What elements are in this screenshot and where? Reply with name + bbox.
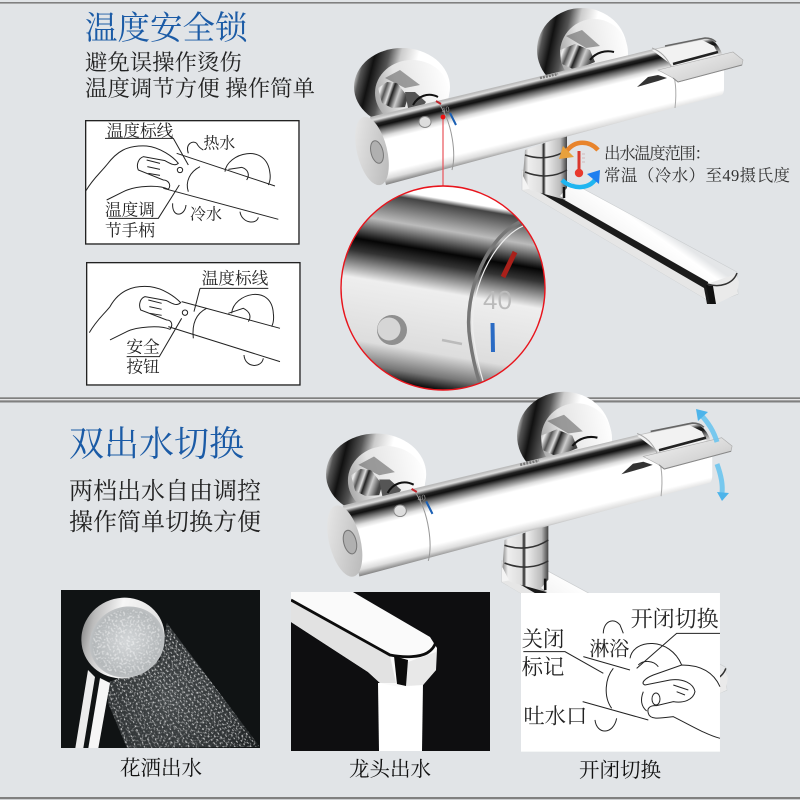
text block: dual outlet description: 两档出水自由调控 (69, 478, 261, 505)
text block: water temperature range (604, 144, 790, 185)
diagram: open and close switching: 淋浴 (589, 638, 629, 661)
magnifier: temperature dial close-up (341, 186, 545, 390)
panel: temperature safety lock (85, 8, 790, 390)
heading: temperature safety lock: 温度安全锁 (85, 10, 248, 47)
diagram: safety button instructions (87, 263, 300, 385)
captions: water outlet modes: 开闭切换 (579, 759, 661, 782)
diagram: open and close switching: 开闭切换 (631, 606, 719, 631)
diagram: temperature handle instructions (86, 121, 299, 244)
diagram: temperature handle instructions: 温度标线 (107, 122, 174, 141)
callout line to magnifier (441, 115, 445, 187)
diagram: open and close switching (521, 593, 720, 752)
faucet illustration: top (349, 8, 743, 304)
text block: water temperature range: 常温（冷水）至49摄氏度 (604, 166, 790, 185)
text block: dual outlet description: 操作简单切换方便 (69, 509, 261, 536)
text block: temperature lock description: 避免误操作烫伤 (85, 50, 242, 75)
diagram: temperature handle instructions: 温度调 (105, 200, 155, 219)
text block: temperature lock description (85, 50, 315, 101)
photo: shower head spray (61, 584, 260, 750)
diagram: safety button instructions: 安全 (126, 338, 160, 357)
diagram: open and close switching: 关闭 (522, 628, 564, 652)
heading: dual outlet switching: 双出水切换 (69, 425, 244, 464)
diagram: open and close switching: 吐水口 (523, 704, 587, 728)
text block: temperature lock description: 温度调节方便 操作简单 (85, 76, 315, 101)
text block: dual outlet description (69, 478, 261, 536)
diagram: temperature handle instructions: 热水 (203, 135, 235, 153)
diagram: temperature handle instructions: 冷水 (190, 205, 222, 223)
diagram: open and close switching: 标记 (522, 655, 564, 679)
captions: water outlet modes (120, 757, 661, 782)
panel: dual water outlet switching (61, 392, 732, 782)
photo: faucet water flow (291, 592, 490, 751)
diagram: safety button instructions: 温度标线 (202, 269, 269, 288)
captions: water outlet modes: 花洒出水 (120, 757, 202, 780)
faucet illustration: bottom (321, 392, 732, 701)
icon: thermometer with temperature arrows (559, 143, 600, 187)
diagram: safety button instructions: 按钮 (126, 358, 160, 377)
magnifier: temperature dial close-up: 40 (483, 285, 512, 315)
diagram: temperature handle instructions: 节手柄 (105, 221, 155, 240)
text block: water temperature range: 出水温度范围： (604, 144, 711, 163)
arrows: lever rotation (696, 409, 729, 501)
captions: water outlet modes: 龙头出水 (349, 758, 431, 781)
